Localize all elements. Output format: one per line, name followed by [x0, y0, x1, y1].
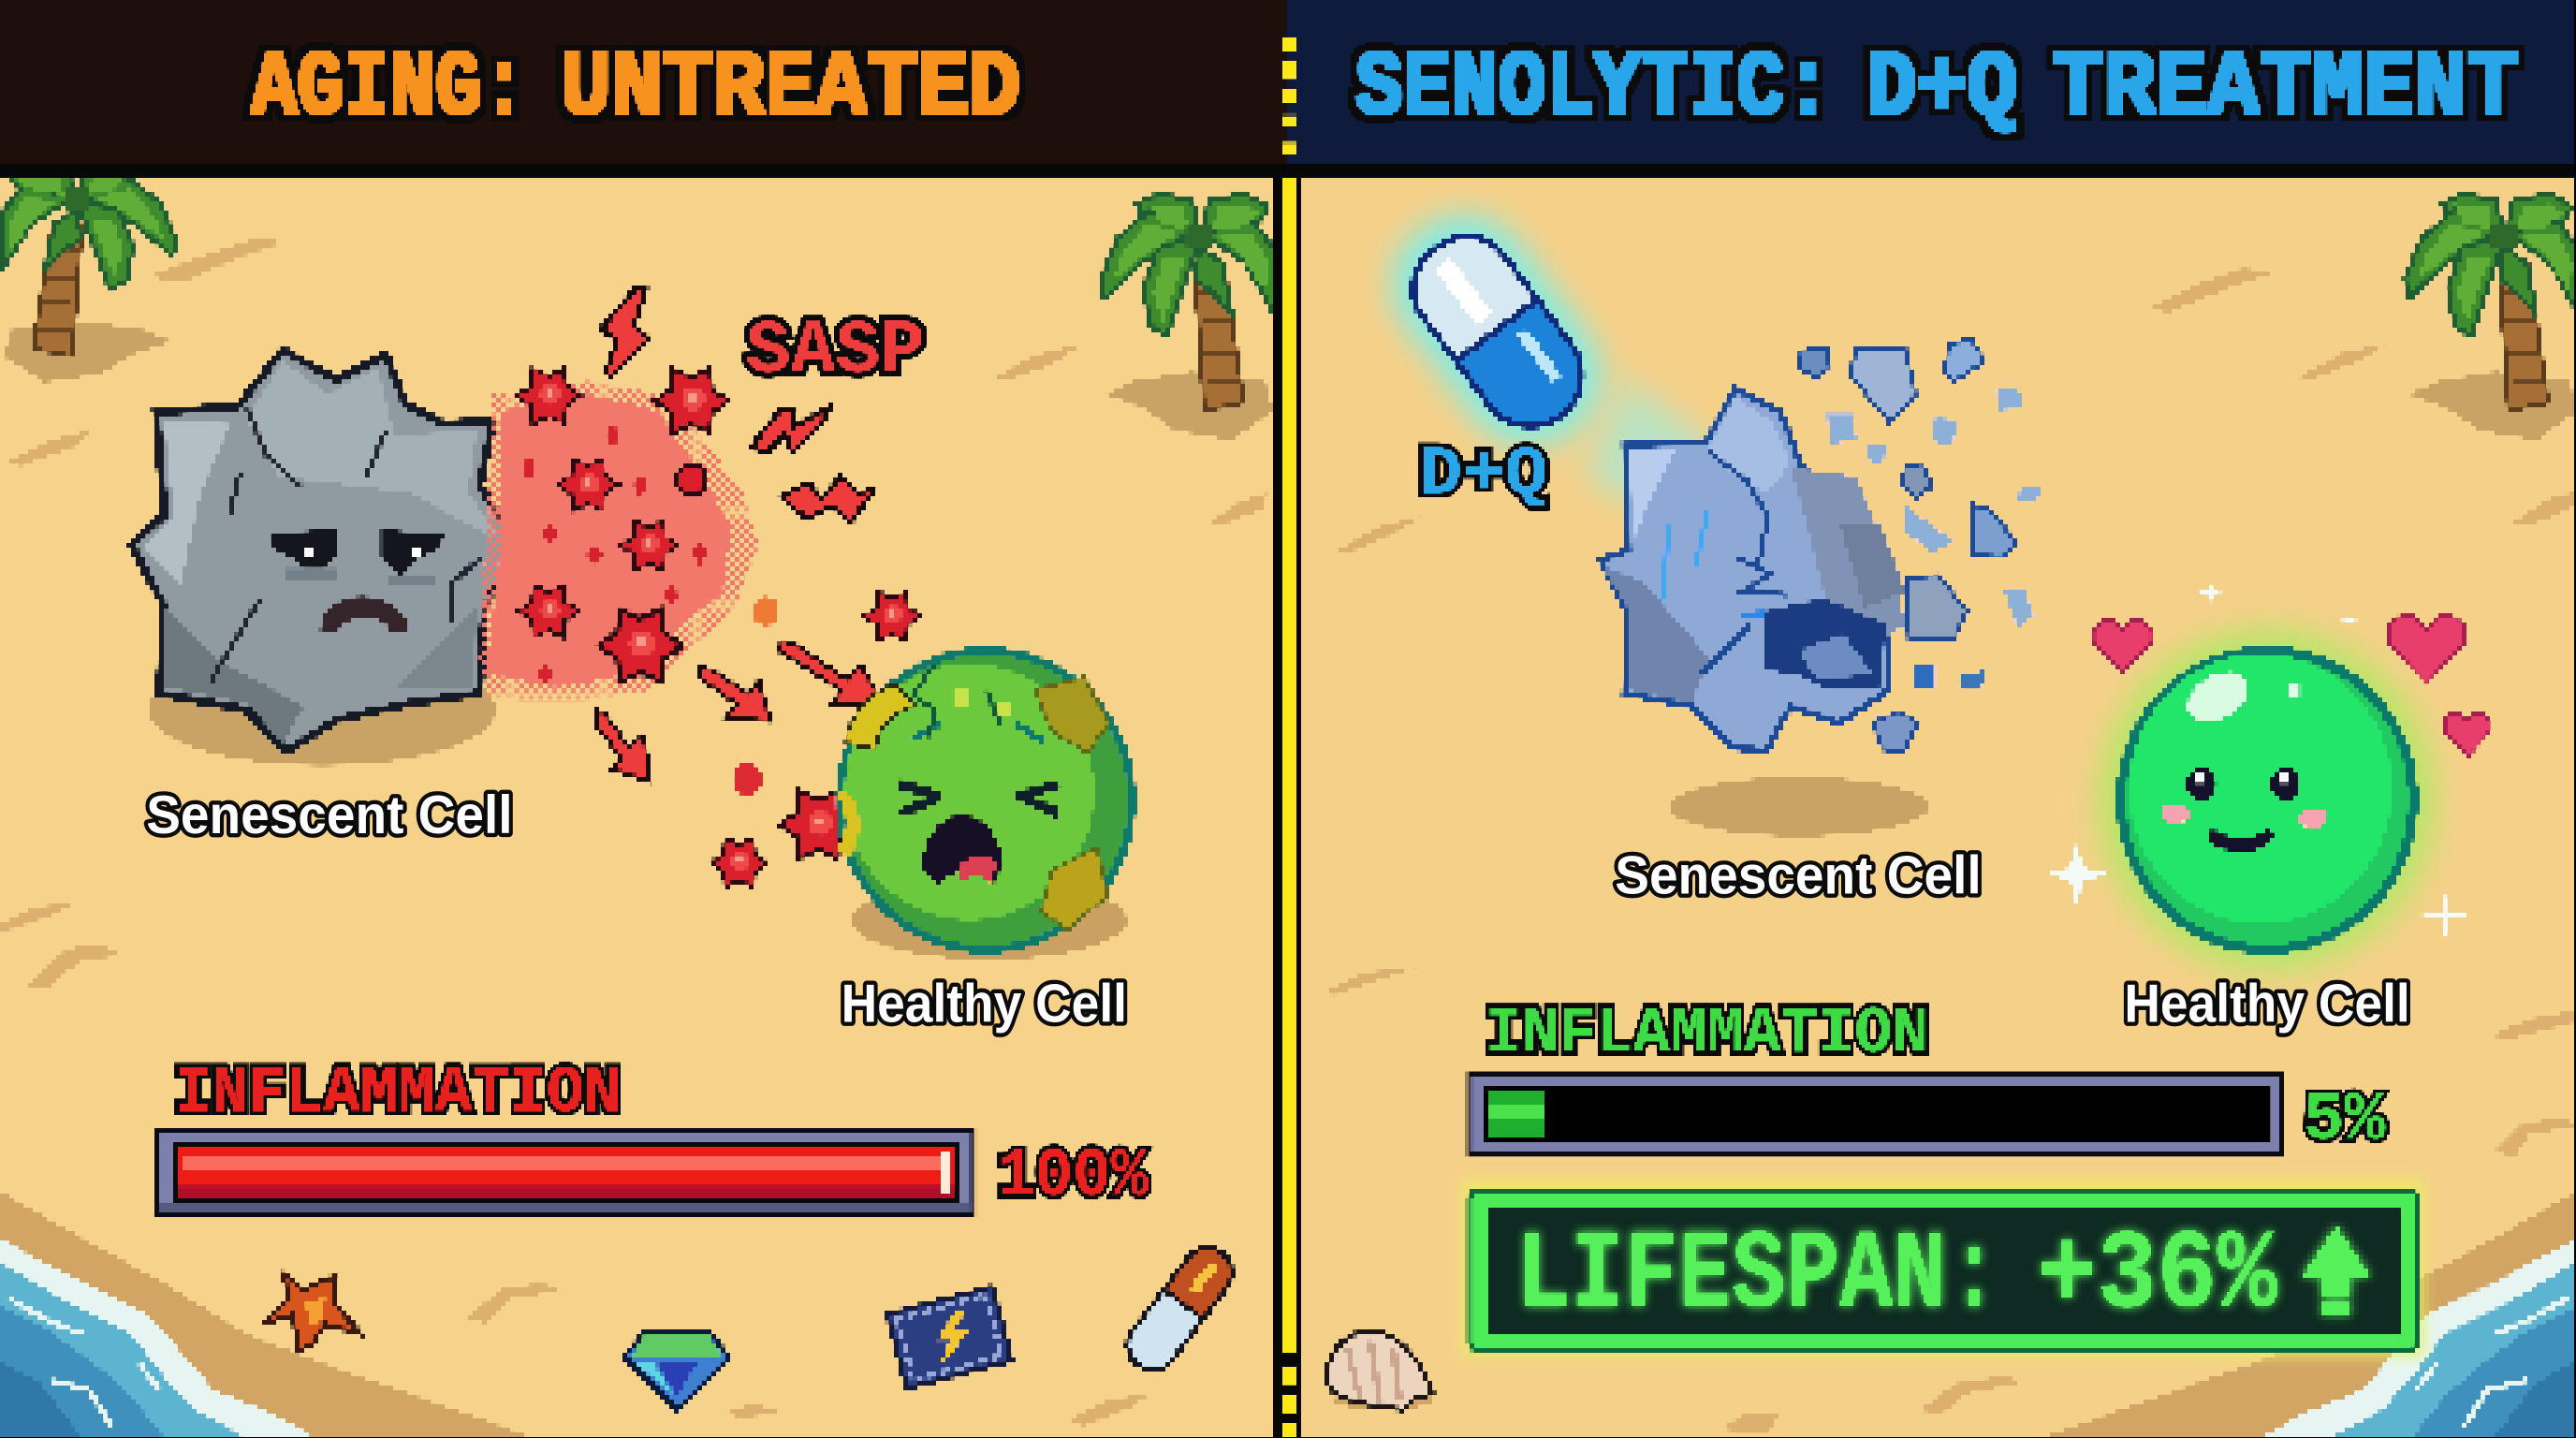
icon: energy card: [887, 1286, 1012, 1388]
shoreline bottom right: [2042, 1191, 2576, 1438]
sand ripple marks: [1325, 268, 2576, 1434]
face: [899, 666, 1060, 814]
D+Q label: D+Q: [1419, 437, 1547, 514]
up arrow: [2302, 1225, 2371, 1314]
cell name labels: [146, 785, 2410, 1034]
inflammation bar: 5%: [1467, 1070, 2285, 1158]
palm tree top left: [2, 163, 176, 383]
header bar: aging untreated: [0, 0, 1288, 165]
icon: pill: [1119, 1239, 1242, 1379]
header bar: senolytic treatment: [1288, 0, 2576, 165]
senescent cell: grey spiky rock: [131, 350, 518, 766]
icon: starfish: [263, 1273, 361, 1351]
cracks: [211, 405, 479, 682]
SASP particles: [517, 368, 920, 888]
blue cracks and squinting eye: [1664, 452, 1788, 674]
pixel text labels: [174, 310, 2386, 1340]
title: senolytic treatment: SENOLYTIC:: [1355, 37, 1832, 141]
header titles: [252, 37, 2519, 141]
floating shards: [1797, 339, 2017, 753]
title: senolytic treatment: [1355, 37, 2519, 141]
label: healthy cell: Healthy Cell: [842, 975, 1127, 1034]
palm tree top right: [1101, 194, 1275, 440]
sparkles: [2047, 579, 2467, 940]
left panel: aging untreated beach: [0, 163, 1281, 1438]
title: aging untreated: UNTREATED: [560, 37, 1020, 141]
title: aging untreated: [252, 37, 1020, 141]
SASP label: SASP: [746, 310, 925, 395]
label: senescent cell: Senescent Cell: [146, 785, 513, 845]
hearts: [2093, 616, 2491, 756]
title: senolytic treatment: D+Q: [1866, 37, 2017, 141]
icon: seashell: [1327, 1331, 1432, 1410]
lifespan text: LIFESPAN:: [1516, 1213, 2001, 1340]
infection patches: [838, 677, 1109, 930]
sand ripple marks: [0, 237, 1268, 1426]
dissolving fragments on the rock: [1764, 468, 1906, 690]
red arrows toward healthy cell: [594, 640, 882, 782]
face: [270, 529, 444, 631]
damaged healthy cell: [838, 651, 1132, 960]
label: senescent cell treated: Senescent Cell: [1615, 846, 1982, 906]
icon: gem: [624, 1332, 729, 1410]
right panel: senolytic treatment beach: [1295, 165, 2576, 1438]
lifespan value: +36%: [2037, 1213, 2277, 1340]
title: senolytic treatment: TREATMENT: [2052, 37, 2519, 141]
shoreline bottom left: [0, 1191, 534, 1438]
lightning bolts: [601, 286, 874, 522]
SASP cloud with red particles: [479, 368, 920, 888]
inflammation label: green: INFLAMMATION: [1486, 998, 1928, 1072]
D+Q capsule with glow: [1367, 189, 1741, 542]
label: healthy cell treated: Healthy Cell: [2124, 975, 2410, 1034]
palm tree right: [2405, 194, 2576, 440]
senescent cell shattering: [1600, 339, 2041, 836]
callout box: lifespan: [1462, 1180, 2425, 1357]
value: 5%: 5%: [2304, 1082, 2386, 1160]
title: aging untreated: AGING:: [252, 37, 527, 141]
inflammation bar: 100%: [156, 1127, 976, 1217]
inflammation label: red: INFLAMMATION: [174, 1057, 621, 1131]
happy healthy cell: [2100, 629, 2435, 971]
face: [2160, 768, 2328, 850]
value: 100%: 100%: [997, 1138, 1149, 1216]
